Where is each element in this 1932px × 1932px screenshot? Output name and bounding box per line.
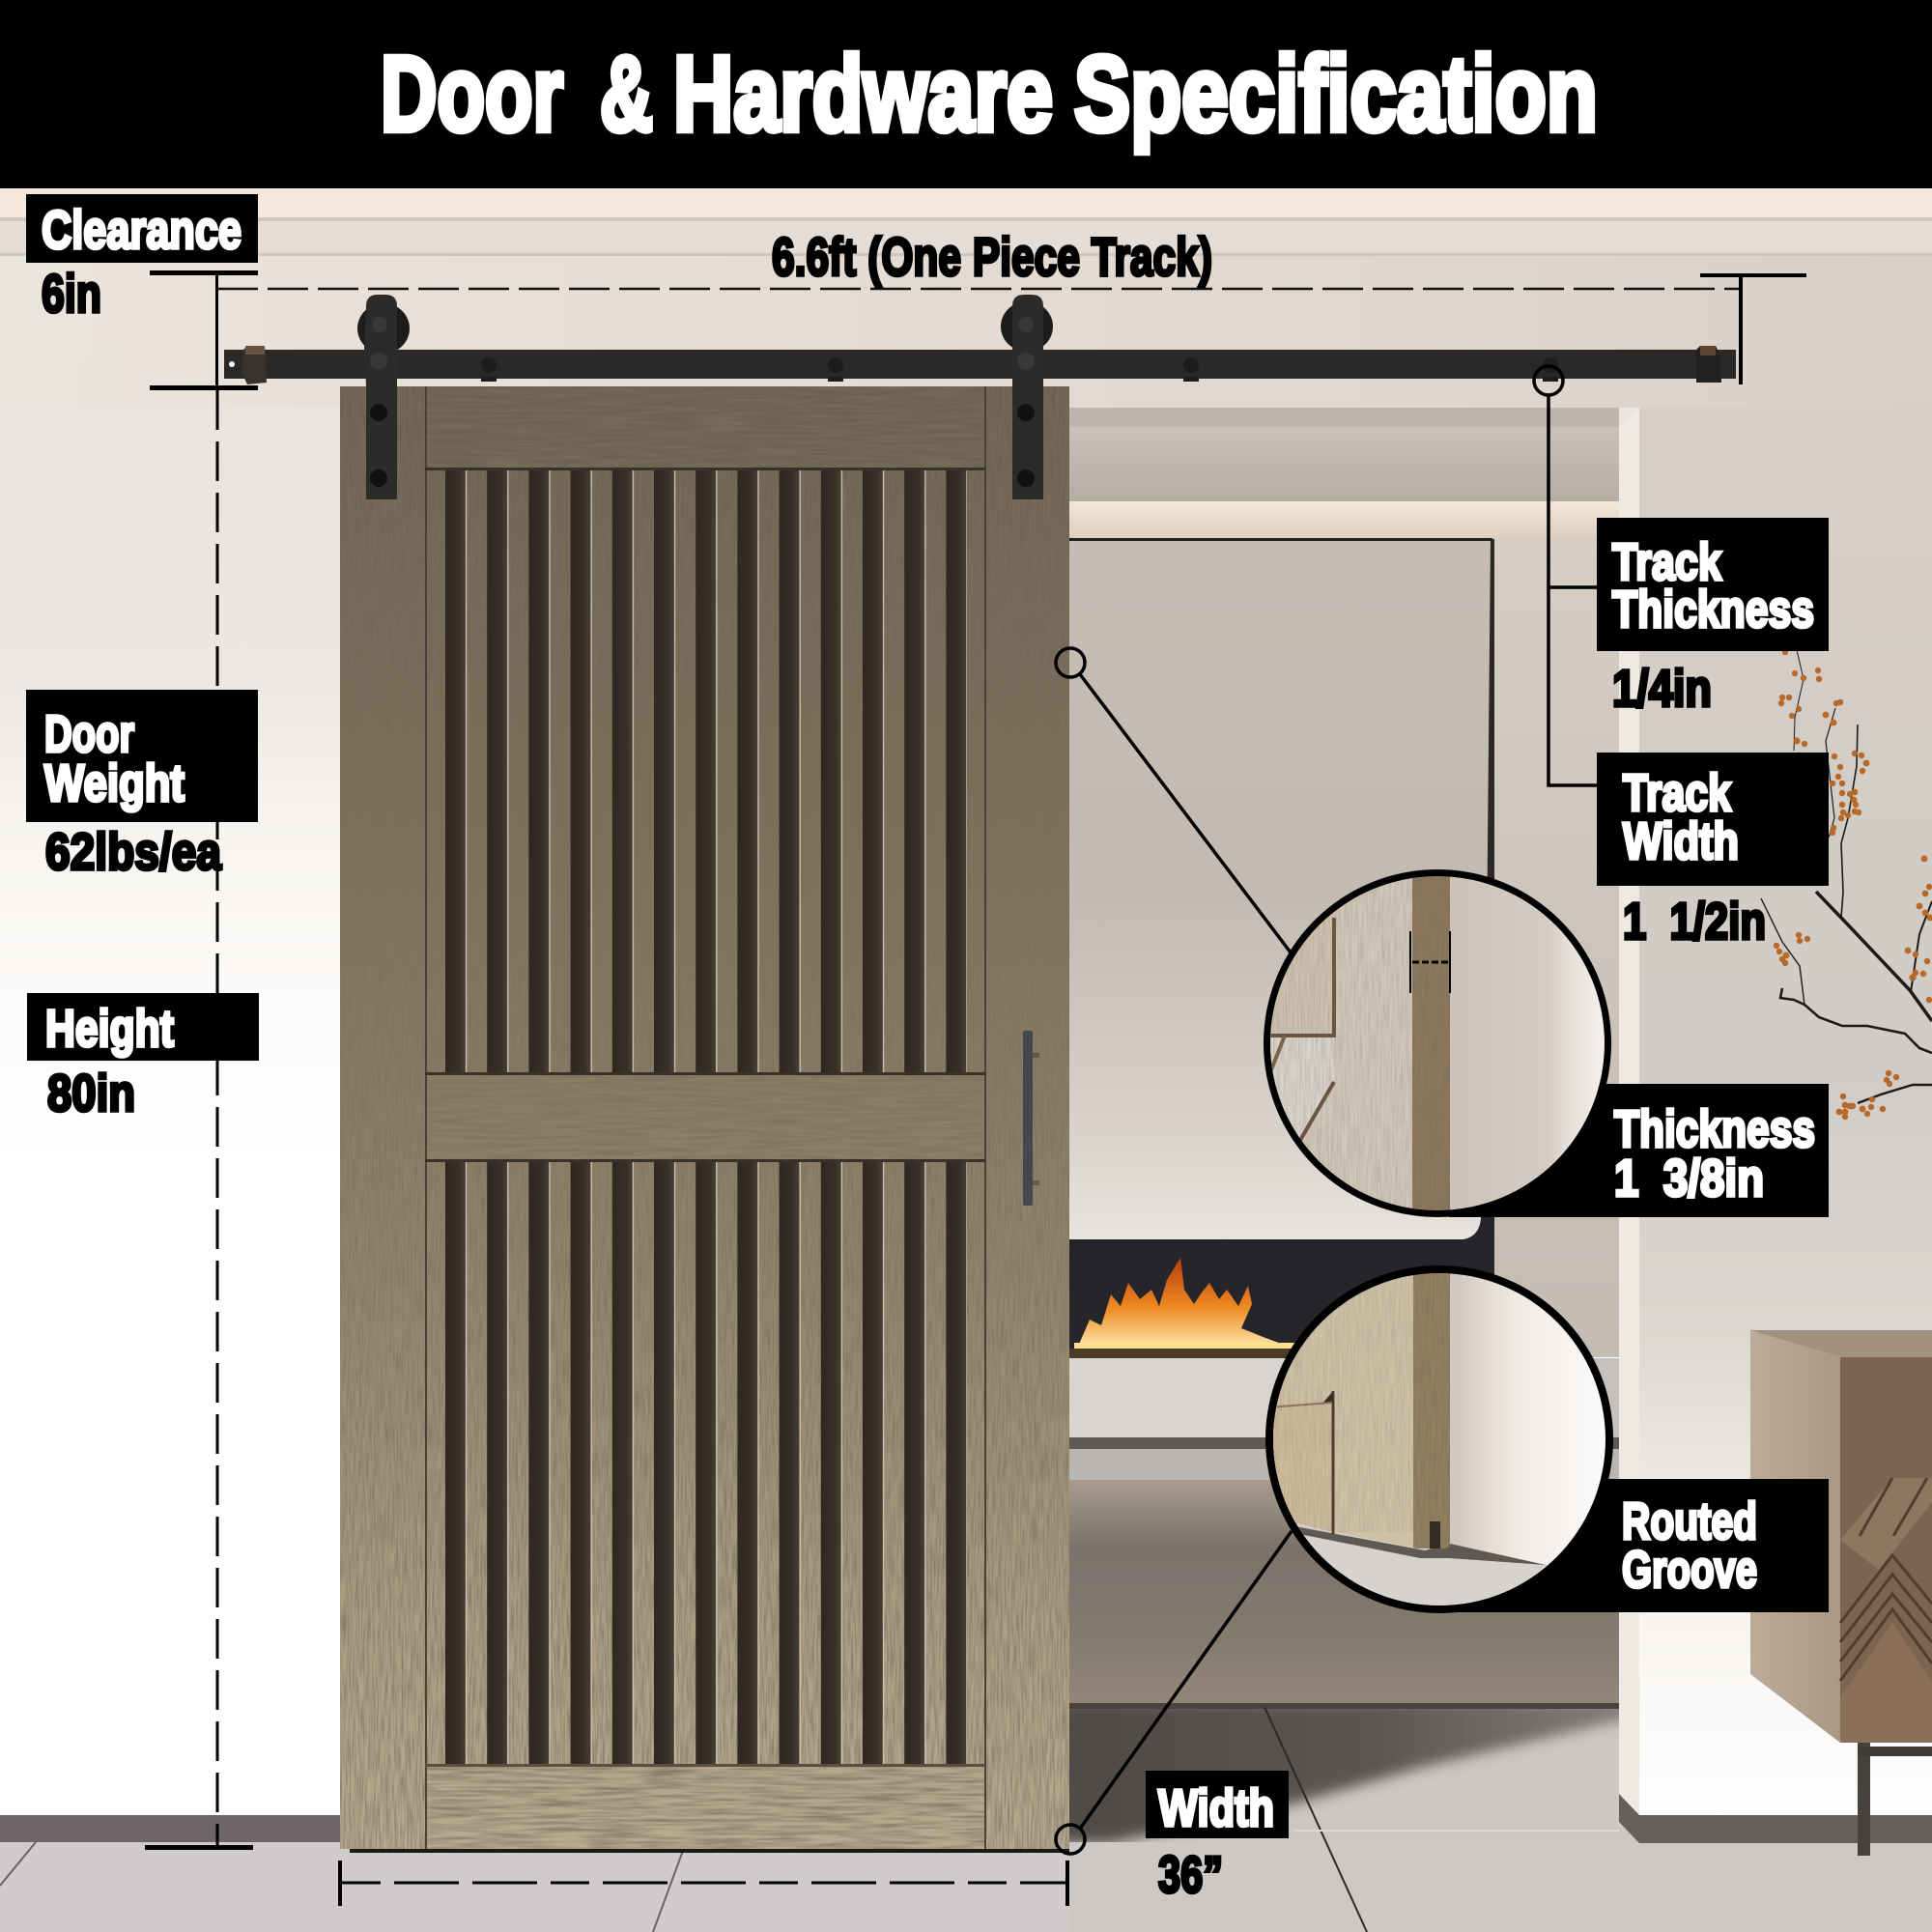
label: height: 80in	[47, 1065, 135, 1122]
label: routed groove: Routed	[1622, 1492, 1757, 1550]
dimension: clearance: Clearance	[42, 199, 242, 260]
door thickness pointer	[1056, 648, 1291, 952]
label: track thickness	[1597, 518, 1829, 718]
label: track width: Track	[1623, 764, 1732, 822]
label: thickness	[1449, 1084, 1829, 1217]
barn door	[340, 386, 1069, 1853]
label: door weight: Door	[44, 705, 134, 763]
label: thickness: Thickness	[1614, 1100, 1815, 1158]
label: track thickness: Track	[1612, 533, 1722, 591]
title bar: &	[600, 35, 653, 154]
left hanger	[357, 295, 410, 499]
label: track thickness: Thickness	[1612, 581, 1814, 639]
track callout connector	[1534, 366, 1597, 785]
label: track width	[1597, 753, 1829, 951]
fireplace	[1069, 1208, 1619, 1480]
dimension line: width	[338, 1861, 1069, 1906]
width pointer	[1056, 1531, 1292, 1854]
dimension line: door height	[145, 390, 253, 1850]
door pull handle	[1023, 1031, 1039, 1206]
label: door weight: Weight	[44, 754, 185, 812]
label: width	[1146, 1771, 1289, 1904]
label: track width: 1 1/2in	[1623, 893, 1766, 951]
label: height	[27, 993, 259, 1122]
sideboard cabinet	[1750, 1330, 1932, 1856]
label: width: 36”	[1158, 1846, 1223, 1904]
detail circle: door thickness	[1256, 869, 1614, 1217]
title bar	[0, 0, 1932, 188]
label: track thickness: 1/4in	[1612, 660, 1712, 718]
label: thickness: 1 3/8in	[1614, 1150, 1764, 1208]
label: door weight	[26, 690, 258, 881]
label: width: Width	[1158, 1779, 1274, 1837]
right hanger	[1001, 295, 1053, 499]
dimension: clearance: 6in	[42, 263, 101, 324]
dimension: clearance	[26, 194, 258, 390]
label: routed groove: Groove	[1622, 1541, 1757, 1599]
dimension: track length: 6.6ft (One Piece Track)	[772, 226, 1212, 287]
title bar: Hardware	[673, 35, 1053, 154]
label: track width: Width	[1623, 812, 1739, 870]
label: routed groove	[1449, 1479, 1829, 1612]
title bar: Door	[381, 35, 563, 154]
title bar: Specification	[1074, 35, 1598, 154]
decorative berry branches	[1761, 649, 1932, 1120]
detail circle: routed groove	[1265, 1265, 1613, 1613]
label: height: Height	[45, 1000, 174, 1058]
sliding track	[224, 346, 1736, 384]
label: door weight: 62lbs/ea	[45, 823, 222, 881]
